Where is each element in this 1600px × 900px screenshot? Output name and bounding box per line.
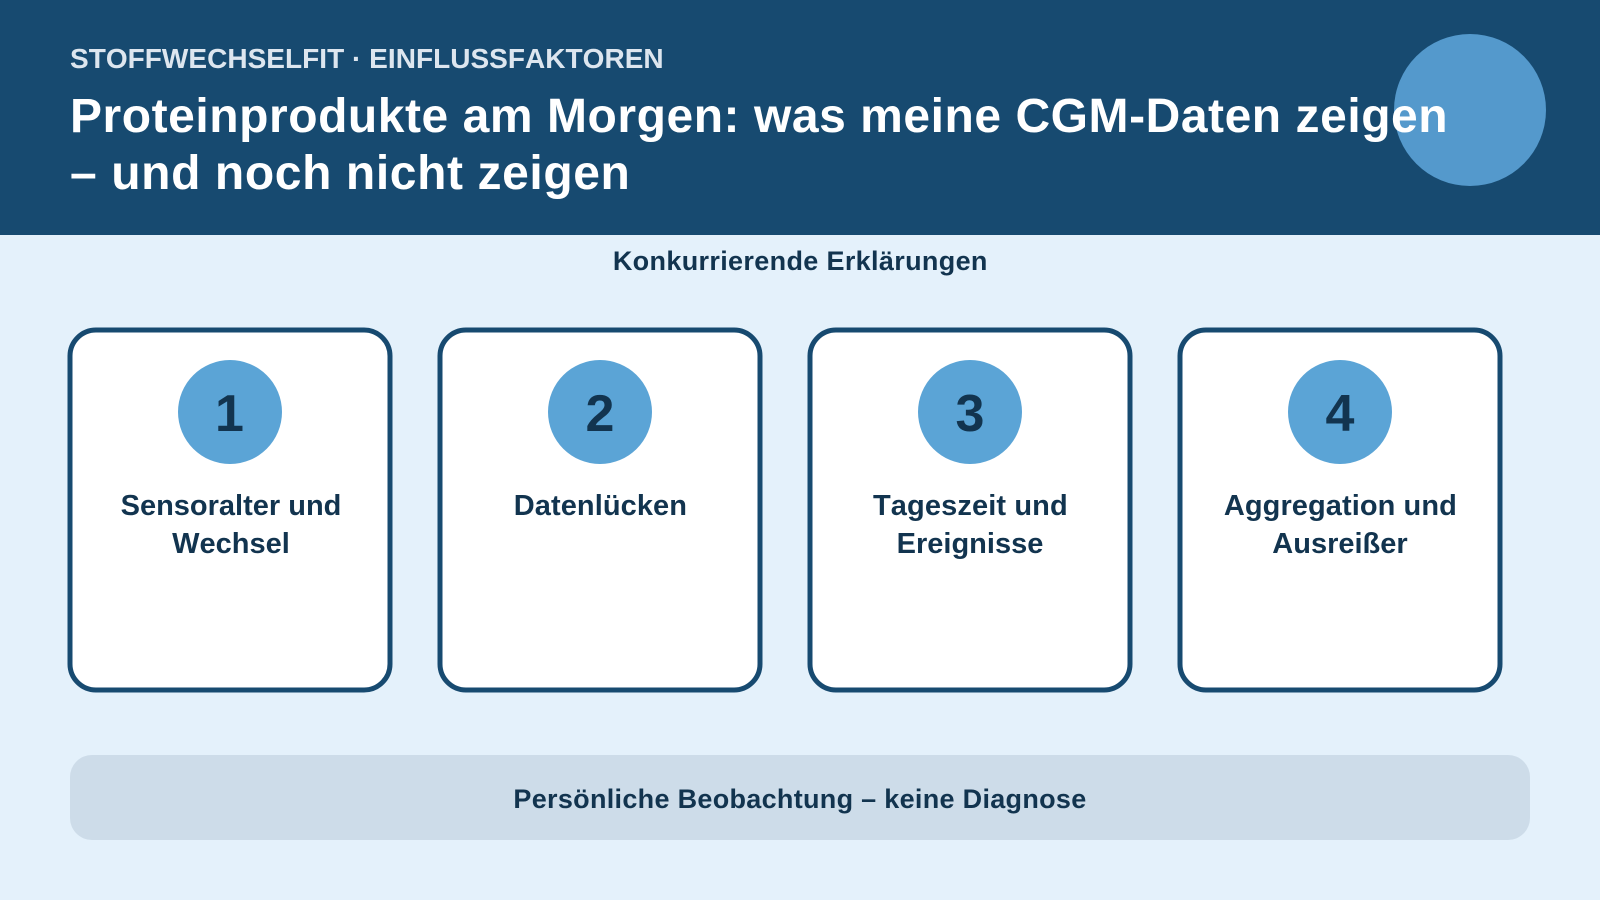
- card 4 label: [1224, 490, 1457, 560]
- header band: [0, 0, 1600, 235]
- number badge 4: 4: [1326, 385, 1355, 443]
- number badge 2: [548, 360, 652, 464]
- panel: card 2: [440, 330, 760, 690]
- number badge 3: [918, 360, 1022, 464]
- card 3 label: Ereignisse: [897, 528, 1043, 560]
- card 1 label: Wechsel: [172, 528, 290, 560]
- footer note: [70, 755, 1530, 840]
- number badge 1: 1: [215, 385, 244, 443]
- section heading: Konkurrierende Erklärungen: [613, 246, 988, 276]
- panel: card 3: [810, 330, 1130, 690]
- card 4 label: Ausreißer: [1272, 528, 1408, 560]
- number badge 3: 3: [956, 385, 984, 443]
- panel: card 4: [1180, 330, 1500, 690]
- card 2 label: Datenlücken: [514, 490, 687, 522]
- number badge 4: [1288, 360, 1392, 464]
- card 1 label: Sensoralter und: [121, 490, 341, 522]
- title: Proteinprodukte am Morgen: was meine CGM-Daten zeigen: [70, 90, 1448, 143]
- eyebrow: STOFFWECHSELFIT · EINFLUSSFAKTOREN: [70, 43, 664, 74]
- card 1 label: [121, 490, 341, 560]
- card 3 label: [873, 490, 1068, 560]
- card 3 label: Tageszeit und: [873, 490, 1068, 522]
- decorative header circle: [1394, 34, 1546, 186]
- title: [70, 90, 1448, 200]
- number badge 2: 2: [586, 385, 614, 443]
- title: – und noch nicht zeigen: [70, 147, 630, 200]
- number badge 1: [178, 360, 282, 464]
- card 4 label: Aggregation und: [1224, 490, 1457, 522]
- footer note: Persönliche Beobachtung – keine Diagnose: [513, 784, 1087, 814]
- panel: card 1: [70, 330, 390, 690]
